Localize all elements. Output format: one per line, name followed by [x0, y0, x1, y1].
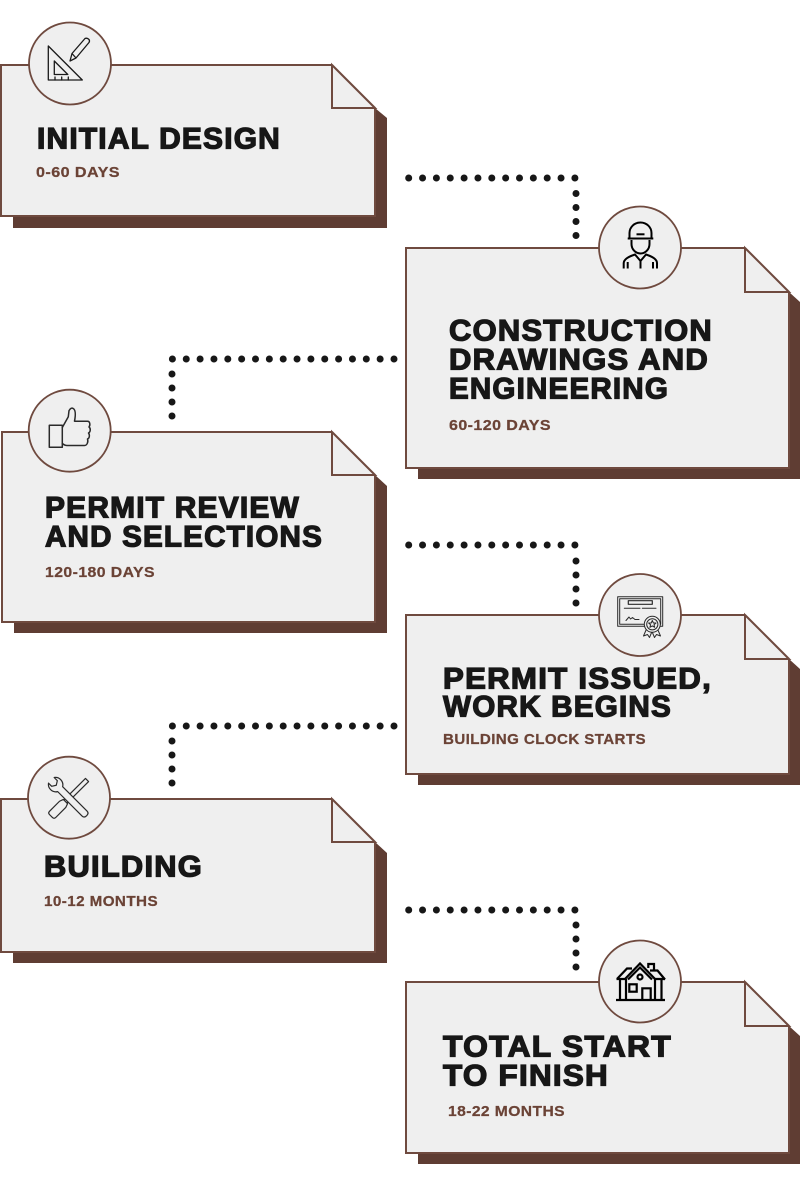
- icon: crossed wrench and screwdriver: [46, 775, 92, 821]
- panel: building: [1, 757, 387, 963]
- duration: 10-12 months: 10-12 MONTHS: [44, 893, 158, 910]
- heading: building: BUILDING: [44, 850, 203, 884]
- heading: total start to finish: [443, 1030, 672, 1092]
- heading: permit issued, work begins: WORK BEGINS: [443, 690, 672, 724]
- heading: construction drawings and engineering: DRAWINGS AND: [449, 344, 709, 376]
- heading: permit review and selections: AND SELECTIONS: [45, 520, 323, 554]
- duration: 60-120 days: 60-120 DAYS: [449, 417, 551, 434]
- heading: permit review and selections: PERMIT REVIEW: [45, 492, 300, 524]
- heading: construction drawings and engineering: CONSTRUCTION: [449, 314, 713, 348]
- icon: set square and pencil: [48, 38, 90, 80]
- connector: step 5 to step 6: [409, 910, 576, 968]
- connector: step 4 to step 5: [172, 726, 394, 784]
- panel: total start to finish: [406, 940, 800, 1164]
- heading: total start to finish: TO FINISH: [443, 1060, 609, 1092]
- icon: house: [616, 964, 665, 1000]
- connector: step 2 to step 3: [172, 359, 394, 417]
- heading: construction drawings and engineering: ENGINEERING: [449, 372, 669, 406]
- heading: total start to finish: TOTAL START: [443, 1030, 672, 1064]
- icon: certificate with seal: [618, 597, 663, 638]
- heading: permit issued, work begins: PERMIT ISSUED,: [443, 662, 712, 696]
- duration: 120-180 days: 120-180 DAYS: [45, 564, 155, 581]
- panel: permit review and selections: [2, 390, 387, 633]
- connector: step 1 to step 2: [409, 178, 576, 236]
- heading: construction drawings and engineering: [449, 314, 713, 406]
- panel: initial design: [1, 22, 387, 228]
- icon: construction worker: [624, 223, 657, 268]
- connector: step 3 to step 4: [409, 545, 576, 604]
- heading: permit review and selections: [45, 492, 323, 554]
- note: building clock starts: BUILDING CLOCK STARTS: [443, 731, 646, 748]
- duration: 0-60 days: 0-60 DAYS: [36, 164, 120, 181]
- icon: thumbs up: [49, 408, 90, 447]
- panel: construction drawings and engineering: [406, 206, 800, 479]
- heading: initial design: INITIAL DESIGN: [37, 122, 281, 156]
- duration: 18-22 months: 18-22 MONTHS: [448, 1103, 565, 1120]
- heading: permit issued, work begins: [443, 662, 712, 724]
- panel: permit issued, work begins: [406, 574, 800, 785]
